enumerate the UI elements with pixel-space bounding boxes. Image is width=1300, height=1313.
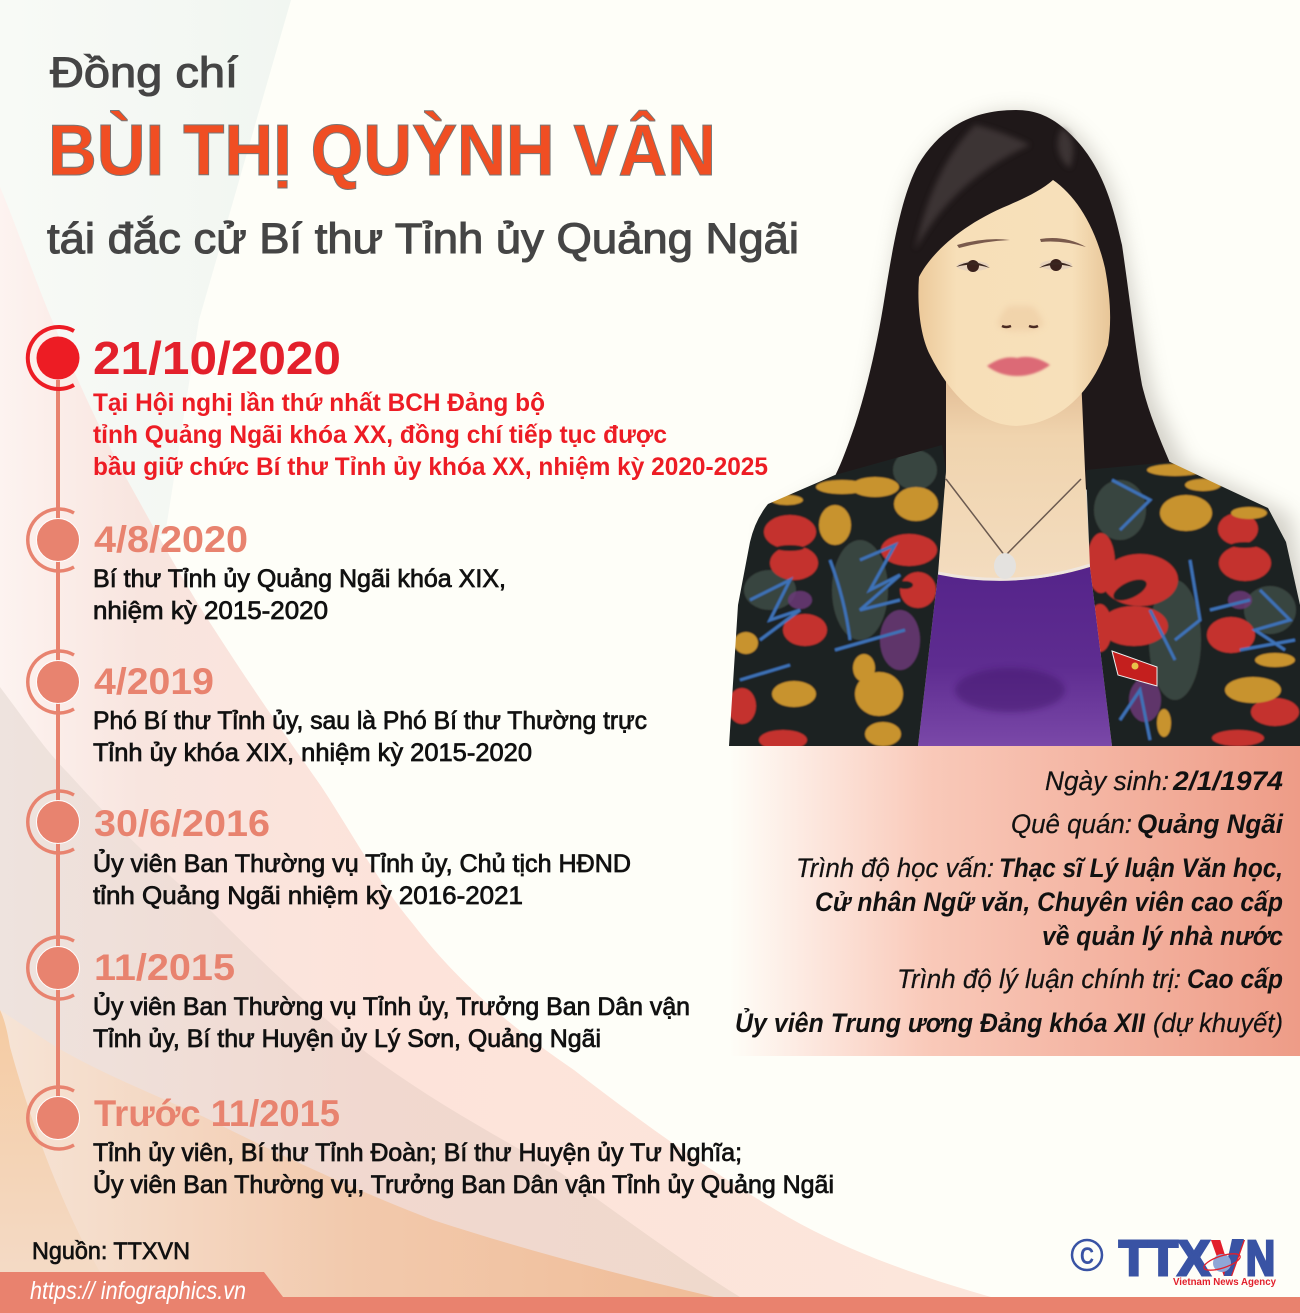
info: central committee: Ủy viên Trung ương Đảng khóa XII — [735, 1006, 1145, 1038]
description: Tỉnh ủy khóa XIX, nhiệm kỳ 2015-2020 — [93, 739, 532, 767]
timeline line — [56, 380, 60, 1100]
jacket — [720, 440, 1300, 750]
logo: copyright — [1072, 1240, 1102, 1270]
info: political theory: Cao cấp — [1187, 964, 1283, 994]
description: Tỉnh ủy, Bí thư Huyện ủy Lý Sơn, Quảng Ngãi — [93, 1025, 601, 1053]
description — [93, 1139, 834, 1199]
nose — [999, 306, 1042, 330]
description: Ủy viên Ban Thường vụ, Trưởng Ban Dân vận Tỉnh ủy Quảng Ngãi — [93, 1169, 834, 1199]
info: education — [796, 853, 1283, 951]
face — [918, 180, 1110, 426]
info: hometown — [1011, 809, 1283, 839]
jacket grey-green patches — [744, 450, 1296, 700]
portrait — [720, 110, 1300, 750]
description: tỉnh Quảng Ngãi khóa XX, đồng chí tiếp tục được — [93, 421, 667, 449]
description: Ủy viên Ban Thường vụ Tỉnh ủy, Trưởng Ban Dân vận — [93, 991, 690, 1021]
logo: copyright: C — [1080, 1243, 1094, 1270]
lips — [987, 357, 1050, 376]
timeline node: 21/10/2020 — [28, 327, 768, 481]
logo: TTXVN: V — [1212, 1232, 1244, 1286]
description: nhiệm kỳ 2015-2020 — [93, 597, 328, 625]
party badge — [1112, 651, 1157, 686]
eyebrows — [957, 238, 1086, 248]
timeline node: 11/2015 — [28, 937, 690, 1053]
eyes — [956, 259, 1073, 272]
jacket blue strokes — [740, 480, 1295, 740]
info: central committee: (dự khuyết) — [1153, 1008, 1283, 1038]
timeline node: 4/8/2020 — [28, 509, 506, 625]
description — [93, 707, 647, 767]
description: Tại Hội nghị lần thứ nhất BCH Đảng bộ — [93, 389, 545, 417]
jacket dark leaf details — [776, 542, 1259, 605]
jacket red flowers — [728, 513, 1299, 750]
info: birth date — [1045, 766, 1283, 796]
shirt fold — [955, 668, 1065, 712]
description: Tỉnh ủy viên, Bí thư Tỉnh Đoàn; Bí thư Huyện ủy Tư Nghĩa; — [93, 1139, 742, 1167]
portrait shadow — [820, 103, 1300, 740]
logo: TTXVN: TTX — [1119, 1232, 1210, 1286]
website url: https:// infographics.vn — [30, 1277, 246, 1305]
title: line 1: Đồng chí — [50, 49, 238, 97]
date: 21/10/2020 — [93, 332, 341, 384]
date: Trước 11/2015 — [94, 1093, 340, 1134]
logo: TTXVN — [1119, 1232, 1276, 1288]
footer bar — [0, 1272, 1300, 1313]
jacket gold flowers — [734, 464, 1295, 746]
date: 11/2015 — [94, 947, 235, 988]
timeline node: 30/6/2016 — [28, 791, 631, 910]
info: education: Trình độ học vấn: — [796, 853, 994, 883]
title: name: BÙI THỊ QUỲNH VÂN — [48, 110, 716, 191]
panel: personal info — [729, 746, 1300, 1056]
hair highlight — [915, 125, 1073, 250]
info: birth date: 2/1/1974 — [1172, 766, 1283, 796]
neckline trim — [938, 565, 1090, 579]
description: Phó Bí thư Tỉnh ủy, sau là Phó Bí thư Thường trực — [93, 707, 647, 735]
info: birth date: Ngày sinh: — [1045, 766, 1169, 796]
description — [93, 565, 506, 625]
description: Ủy viên Ban Thường vụ Tỉnh ủy, Chủ tịch HĐND — [93, 848, 631, 878]
logo: TTXVN: Vietnam News Agency — [1173, 1276, 1276, 1288]
description: bầu giữ chức Bí thư Tỉnh ủy khóa XX, nhiệm kỳ 2020-2025 — [93, 453, 768, 481]
title: line 3: tái đắc cử Bí thư Tỉnh ủy Quảng Ngãi — [47, 215, 799, 263]
timeline node: Trước 11/2015 — [28, 1087, 834, 1199]
description — [93, 848, 631, 910]
necklace — [946, 479, 1081, 579]
description: tỉnh Quảng Ngãi nhiệm kỳ 2016-2021 — [93, 882, 523, 910]
info: education: về quản lý nhà nước — [1042, 921, 1283, 951]
shirt — [918, 567, 1112, 746]
date: 30/6/2016 — [94, 803, 270, 844]
date: 4/8/2020 — [94, 519, 248, 560]
hair — [835, 110, 1170, 490]
info: hometown: Quảng Ngãi — [1137, 809, 1283, 839]
jacket purple accents — [788, 591, 1252, 722]
date: 4/2019 — [94, 661, 214, 702]
source: Nguồn: TTXVN — [32, 1238, 190, 1265]
description: Bí thư Tỉnh ủy Quảng Ngãi khóa XIX, — [93, 565, 506, 593]
title block — [47, 49, 799, 263]
neck — [938, 375, 1090, 581]
info: hometown: Quê quán: — [1011, 809, 1132, 839]
description — [93, 389, 768, 481]
description — [93, 991, 690, 1053]
logo: TTXVN: N — [1246, 1232, 1275, 1286]
timeline node: 4/2019 — [28, 651, 647, 767]
info: political theory: Trình độ lý luận chính trị: — [897, 964, 1181, 994]
